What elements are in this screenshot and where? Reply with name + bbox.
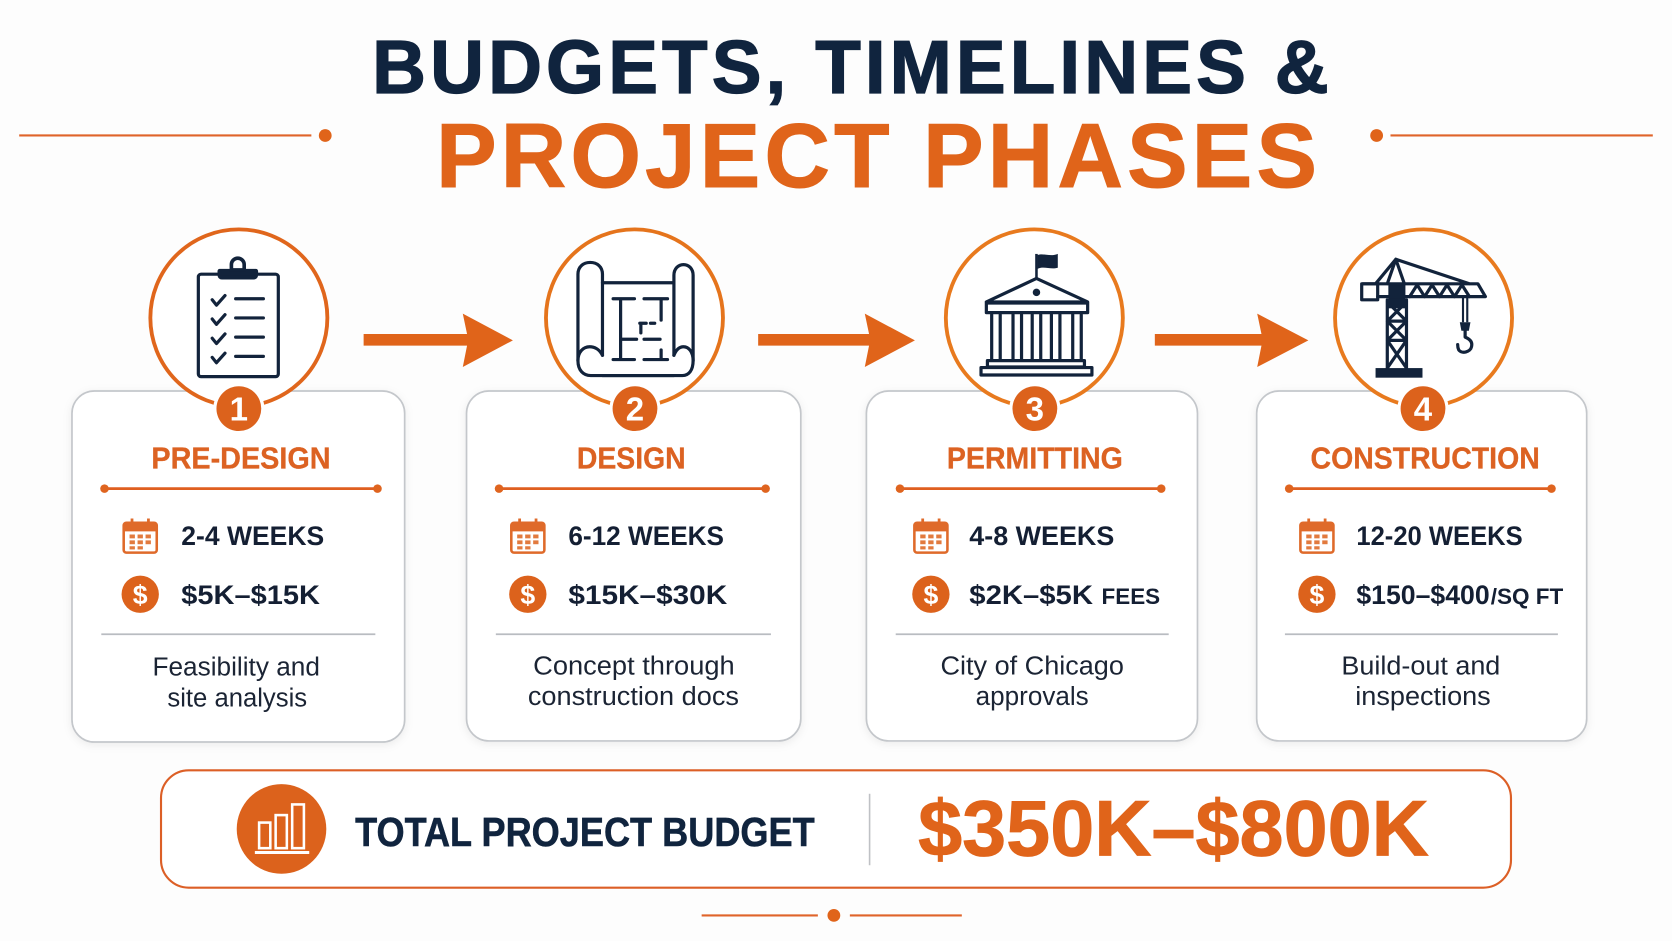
icon: dollar: $ (133, 580, 148, 610)
panel: design (467, 229, 801, 741)
duration: 12-20 WEEKS (1356, 521, 1523, 551)
banner divider (869, 794, 871, 865)
heading rule (896, 484, 1165, 493)
card (1257, 391, 1587, 741)
badge 1: 1 (230, 391, 248, 428)
icon: clipboard checklist (198, 258, 278, 377)
description (528, 652, 739, 711)
badge 3 (1009, 383, 1060, 434)
arrow 3 (1155, 314, 1308, 367)
icon: government building (981, 254, 1092, 375)
cost: $5K–$15K (181, 580, 320, 610)
card (72, 391, 405, 742)
description: Concept through (533, 652, 735, 680)
panel: permitting (866, 229, 1197, 741)
heading: PRE-DESIGN (151, 440, 331, 475)
icon: calendar (124, 519, 157, 553)
icon: calendar (914, 519, 947, 553)
icon: dollar: $ (520, 580, 535, 610)
banner frame (161, 770, 1511, 888)
card (467, 391, 801, 741)
cost: FEES (1102, 584, 1160, 609)
icon: calendar (511, 519, 544, 553)
icon: dollar (1298, 576, 1336, 613)
cost: $150–$400 (1356, 580, 1490, 610)
title ornament left (19, 129, 332, 142)
icon: dollar (509, 576, 546, 613)
cost (1356, 580, 1564, 610)
title line 2: PROJECT PHASES (436, 106, 1317, 207)
badge 4 (1397, 383, 1449, 434)
title (372, 25, 1329, 207)
description: Build-out and (1341, 652, 1500, 680)
description (152, 653, 320, 712)
duration: 6-12 WEEKS (568, 521, 724, 551)
description: Feasibility and (152, 653, 320, 681)
phase circle (946, 229, 1123, 406)
panel: pre-design (72, 229, 405, 742)
description: construction docs (528, 683, 739, 711)
divider (101, 633, 375, 635)
badge 4: 4 (1414, 391, 1433, 428)
icon: dollar: $ (923, 580, 938, 610)
badge 1 (213, 383, 264, 434)
divider (496, 633, 771, 635)
heading: DESIGN (577, 440, 686, 475)
phase circle (150, 229, 327, 406)
description: City of Chicago (940, 652, 1124, 680)
banner label: TOTAL PROJECT BUDGET (355, 809, 815, 855)
cost: $15K–$30K (568, 580, 727, 610)
phase circle (546, 229, 723, 406)
badge 3: 3 (1026, 391, 1044, 428)
icon: blueprint (578, 262, 693, 376)
arrow 1 (364, 314, 513, 367)
icon: calendar (1300, 519, 1333, 553)
icon: dollar: $ (1310, 580, 1324, 610)
description (940, 652, 1124, 711)
heading: CONSTRUCTION (1311, 440, 1540, 475)
divider (896, 633, 1169, 635)
icon: bar chart (237, 784, 326, 874)
bottom ornament (702, 909, 962, 922)
cost: /SQ FT (1491, 584, 1564, 609)
heading rule (495, 484, 770, 493)
heading rule (100, 484, 382, 493)
divider (1285, 633, 1558, 635)
description: inspections (1355, 683, 1491, 711)
duration: 2-4 WEEKS (181, 521, 324, 551)
cost: $2K–$5K (969, 580, 1093, 610)
arrow 2 (758, 314, 915, 367)
heading: PERMITTING (947, 440, 1123, 475)
phase circle (1335, 229, 1512, 406)
cost (969, 580, 1160, 610)
description (1341, 652, 1500, 711)
title line 1: BUDGETS, TIMELINES & (372, 25, 1329, 109)
banner value: $350K–$800K (918, 785, 1429, 873)
description: approvals (976, 683, 1089, 711)
heading rule (1285, 484, 1556, 493)
title ornament right (1370, 129, 1653, 142)
badge 2: 2 (626, 391, 644, 428)
icon: dollar (122, 576, 159, 613)
card (866, 391, 1197, 741)
icon: tower crane (1362, 259, 1485, 378)
icon: dollar (912, 576, 950, 613)
duration: 4-8 WEEKS (969, 521, 1114, 551)
panel: construction (1257, 229, 1587, 741)
description: site analysis (167, 684, 307, 712)
badge 2 (609, 383, 661, 434)
total budget banner (161, 770, 1511, 888)
